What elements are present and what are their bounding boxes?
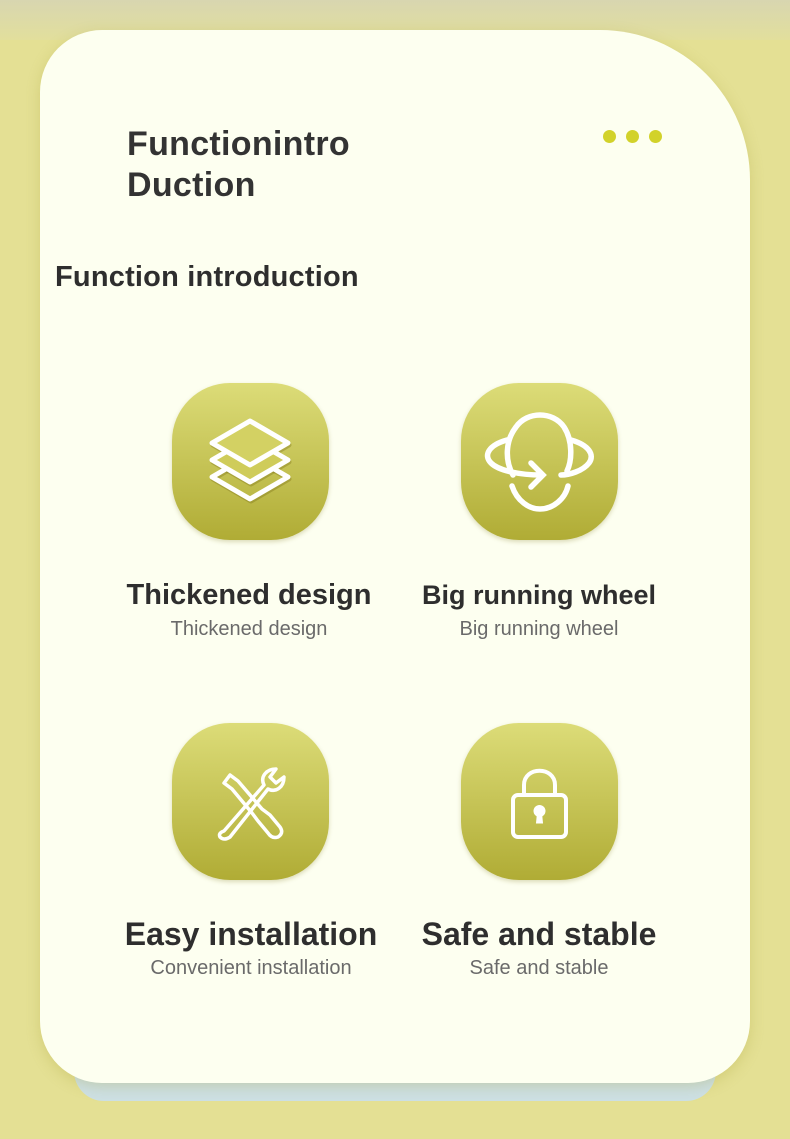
title: Duction (127, 166, 256, 204)
text: big running wheel: Big running wheel (422, 580, 656, 610)
text: big running wheel: Big running wheel (460, 618, 618, 640)
text: safe and stable (422, 916, 656, 979)
icon: three dots (603, 130, 662, 143)
text: safe and stable: Safe and stable (422, 916, 656, 952)
icon: layers (172, 383, 329, 540)
text: safe and stable: Safe and stable (470, 957, 608, 979)
text: thickened design (126, 579, 371, 640)
text: thickened design: Thickened design (127, 579, 371, 611)
text: big running wheel (422, 580, 656, 640)
title: Functionintro (127, 125, 350, 163)
text: easy installation (125, 916, 377, 979)
heading: function introduction: Function introduction (55, 261, 359, 293)
icon: tools (172, 723, 329, 880)
icon: padlock (461, 723, 618, 880)
title (127, 125, 350, 204)
text: easy installation: Convenient installation (150, 957, 352, 979)
icon: rotating sphere (461, 383, 618, 540)
text: thickened design: Thickened design (171, 618, 327, 640)
text: easy installation: Easy installation (125, 916, 377, 952)
